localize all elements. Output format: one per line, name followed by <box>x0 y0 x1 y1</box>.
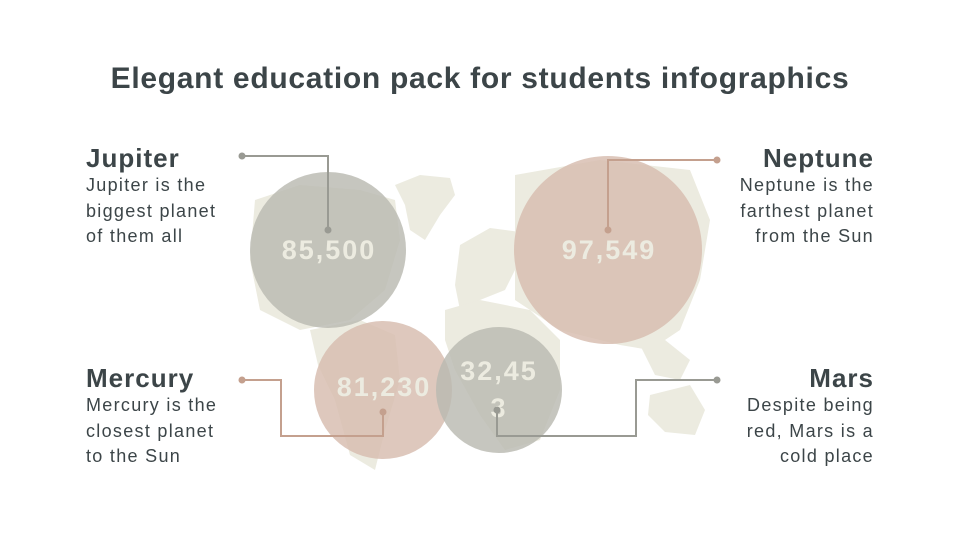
bubble: Mars <box>436 327 562 453</box>
bubble: Mercury: 81,230 <box>337 372 431 402</box>
text: Neptune: Neptune is the <box>740 175 874 195</box>
connector: Neptune <box>604 156 720 234</box>
text: Mars: red, Mars is a <box>747 420 874 440</box>
bubble: Jupiter: 85,500 <box>282 235 376 265</box>
bubble: Mercury <box>314 321 452 459</box>
title: Elegant education pack for students infographics <box>111 62 849 95</box>
text: Mercury: Mercury is the <box>86 395 217 415</box>
connector: Mars <box>494 376 720 436</box>
bubble: Mars: 32,45 <box>460 356 538 386</box>
text: Mars <box>747 363 874 466</box>
text: Neptune: Neptune <box>763 143 874 173</box>
text: Mercury: closest planet <box>86 420 214 440</box>
text: Neptune: farthest planet <box>740 200 874 220</box>
text: Jupiter: Jupiter is the <box>86 175 206 195</box>
text: Jupiter: Jupiter <box>86 143 180 173</box>
text: Jupiter <box>86 143 216 246</box>
text: Jupiter: of them all <box>86 226 183 246</box>
text: Mercury: Mercury <box>86 363 194 393</box>
text: Neptune: from the Sun <box>755 226 874 246</box>
text: Mercury <box>86 363 217 466</box>
text: Mars: cold place <box>780 446 874 466</box>
text: Mercury: to the Sun <box>86 446 181 466</box>
connector: Jupiter <box>238 152 332 234</box>
bubble: Neptune <box>514 156 702 344</box>
connector: Mercury <box>238 376 386 436</box>
world map <box>250 160 710 470</box>
text: Mars: Despite being <box>747 395 874 415</box>
text: Jupiter: biggest planet <box>86 200 216 220</box>
bubble: Neptune: 97,549 <box>562 235 656 265</box>
bubble: Mars: 3 <box>490 393 506 423</box>
bubble: Jupiter <box>250 172 406 328</box>
text: Mars: Mars <box>809 363 874 393</box>
text: Neptune <box>740 143 874 246</box>
